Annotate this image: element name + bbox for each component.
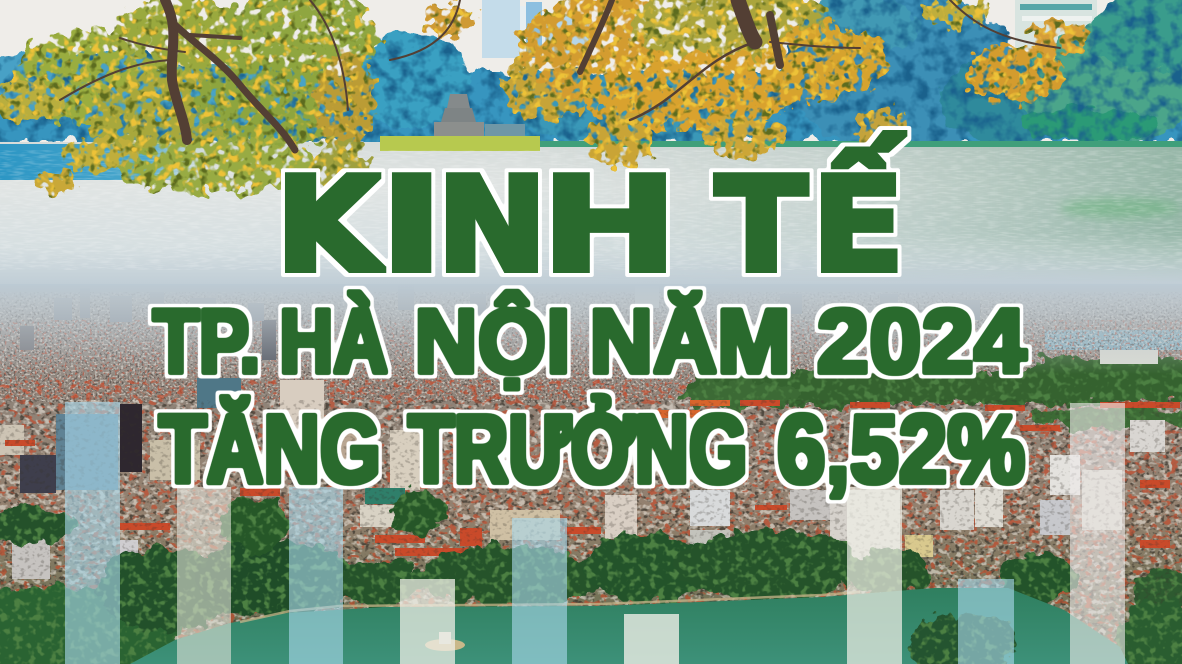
title: KINH TẾ: I [379, 149, 445, 301]
landmark: Turtle Tower islet [425, 632, 465, 651]
title: KINH TẾ [276, 132, 905, 301]
distant towers [20, 293, 980, 360]
lower lake Hoan Kiem [130, 588, 1128, 664]
green park belts [680, 358, 1182, 610]
landmark: Turtle Tower [434, 94, 525, 136]
translucent bar chart [65, 402, 1125, 664]
title: KINH TẾ: T [715, 149, 807, 301]
tree branches [60, 0, 1060, 150]
dense near rooftops [0, 380, 1182, 664]
background: pale towers behind the lake [482, 0, 1097, 60]
subtitle: TP. HÀ NỘI NĂM 2024: NỘI [414, 290, 571, 392]
foliage: right tree [424, 0, 1088, 166]
subtitle: TP. HÀ NỘI NĂM 2024 [153, 290, 1027, 392]
title: KINH TẾ: N [437, 149, 547, 301]
title: KINH TẾ: Ế [812, 132, 905, 301]
landmark: lake island [908, 613, 1016, 664]
background: sky [0, 0, 1182, 145]
headline figure: TĂNG TRƯỞNG 6,52%: TĂNG [159, 394, 381, 504]
dense distant rooftops [0, 292, 1182, 402]
subtitle: TP. HÀ NỘI NĂM 2024: 2024 [817, 292, 1027, 392]
red roofs [5, 400, 1180, 565]
subtitle: TP. HÀ NỘI NĂM 2024: HÀ [279, 292, 388, 392]
subtitle: TP. HÀ NỘI NĂM 2024: NĂM [589, 292, 791, 392]
headline figure: TĂNG TRƯỞNG 6,52% [159, 394, 1025, 504]
lake shore path [240, 592, 860, 622]
foliage: left tree [0, 0, 380, 202]
background: far tree line [0, 0, 1182, 150]
title: KINH TẾ: K [276, 149, 384, 301]
upper lake water [0, 136, 1182, 292]
mid-rise buildings [0, 350, 1165, 579]
city panorama [0, 280, 1182, 664]
subtitle: TP. HÀ NỘI NĂM 2024: TP. [153, 292, 260, 392]
trees around the lower lake [0, 490, 1182, 664]
headline figure: TĂNG TRƯỞNG 6,52%: 6,52% [777, 394, 1025, 504]
title: KINH TẾ: H [541, 149, 678, 301]
headline figure: TĂNG TRƯỞNG 6,52%: TRƯỞNG [408, 394, 747, 504]
fine texture over buildings [0, 400, 1182, 634]
